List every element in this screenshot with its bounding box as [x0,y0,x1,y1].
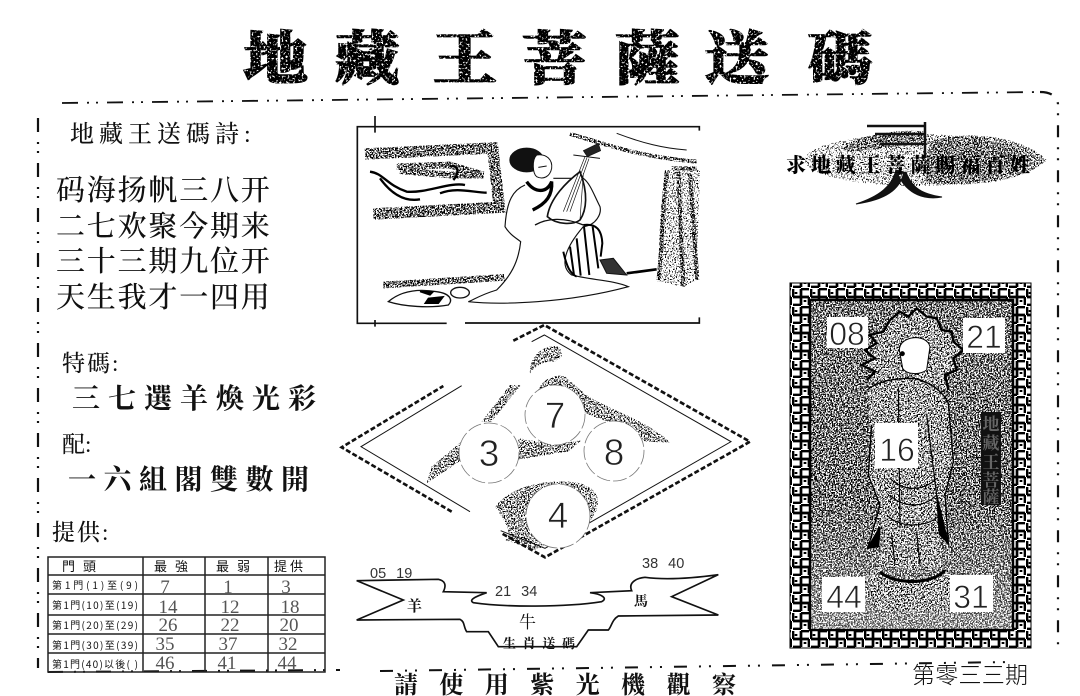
number boxes [822,316,1005,615]
Jizo figure panel [790,283,1031,648]
poem heading: 地藏王送碼詩: [70,121,256,148]
data table: 第1門(20)至(29) [52,617,138,632]
issue number: 第零三三期 [912,656,1028,690]
central diamond with numbers [342,325,750,557]
match text: 一六組閣雙數開 [68,464,317,496]
zodiac ribbon: 馬 [634,594,648,610]
special code text: 三七選羊煥光彩 [72,383,324,415]
meander border [790,283,1031,648]
special code label: 特碼: [62,351,120,376]
banner text: 求地藏王菩薩賜福百姓 [786,149,1030,178]
data table: 第1門(10)至(19) [52,597,138,612]
data table: 14 [158,597,178,618]
data table [48,556,325,674]
data table: 32 [278,634,298,655]
data table: 44 [278,653,297,674]
number boxes: 44 [826,579,862,615]
number boxes: 21 [966,319,1002,355]
central diamond with numbers: 8 [604,432,624,473]
central diamond with numbers: 4 [548,495,568,536]
data table: 22 [220,615,240,636]
zodiac ribbon [357,556,718,651]
match label: 配: [62,432,91,457]
data table: 提供 [274,556,306,575]
zodiac ribbon: 羊 [407,598,422,615]
data table: 41 [218,653,236,674]
data table: 18 [280,597,300,618]
vertical inscription: 薩 [982,487,1000,507]
poem text [56,174,272,314]
illustration: woman playing pipa [357,116,700,327]
data table: 最強 [154,556,196,575]
number boxes: 08 [829,316,865,352]
data table: 第1門(1)至(9) [52,577,138,592]
title: 地藏王菩薩送碼 [243,12,872,96]
data table: 26 [158,615,178,636]
data table: 第1門(40)以後( ) [52,656,138,671]
data table: 門頭 [62,556,104,575]
vertical inscription: 菩 [982,470,1000,490]
zodiac ribbon: 05 19 [370,566,412,582]
data table: 3 [281,577,291,598]
data table: 35 [156,634,174,655]
poem text: 三十三期九位开 [56,245,272,278]
data table: 1 [223,577,233,598]
emblem banner with oval [786,122,1047,204]
vertical inscription: 王 [982,453,1000,472]
data table: 20 [280,615,298,636]
vertical inscription: 地 [982,415,1000,434]
poem text: 天生我才一四用 [56,281,272,314]
zodiac ribbon: 牛 [519,613,536,632]
data table: 46 [156,653,174,674]
zodiac ribbon: 21 34 [495,584,537,600]
poem text: 二七欢聚今期来 [56,210,272,243]
data table: 37 [218,634,238,655]
zodiac ribbon: 38 40 [642,556,684,572]
data table: 最弱 [216,556,258,575]
number boxes: 31 [953,579,989,615]
number boxes: 16 [879,432,915,468]
central diamond with numbers: 7 [545,395,565,436]
vertical inscription [981,412,1001,507]
zodiac ribbon: 生肖送碼 [503,636,575,651]
dashed outer frame [38,92,1058,672]
data table: 12 [220,597,240,618]
vertical inscription: 藏 [982,433,1000,453]
poem text: 码海扬帆三八开 [56,174,272,207]
data table: 7 [160,577,170,598]
halo and figure [857,308,967,612]
data table: 第1門(30)至(39) [52,637,138,652]
central diamond with numbers: 3 [479,433,499,474]
provider label: 提供: [52,520,110,545]
